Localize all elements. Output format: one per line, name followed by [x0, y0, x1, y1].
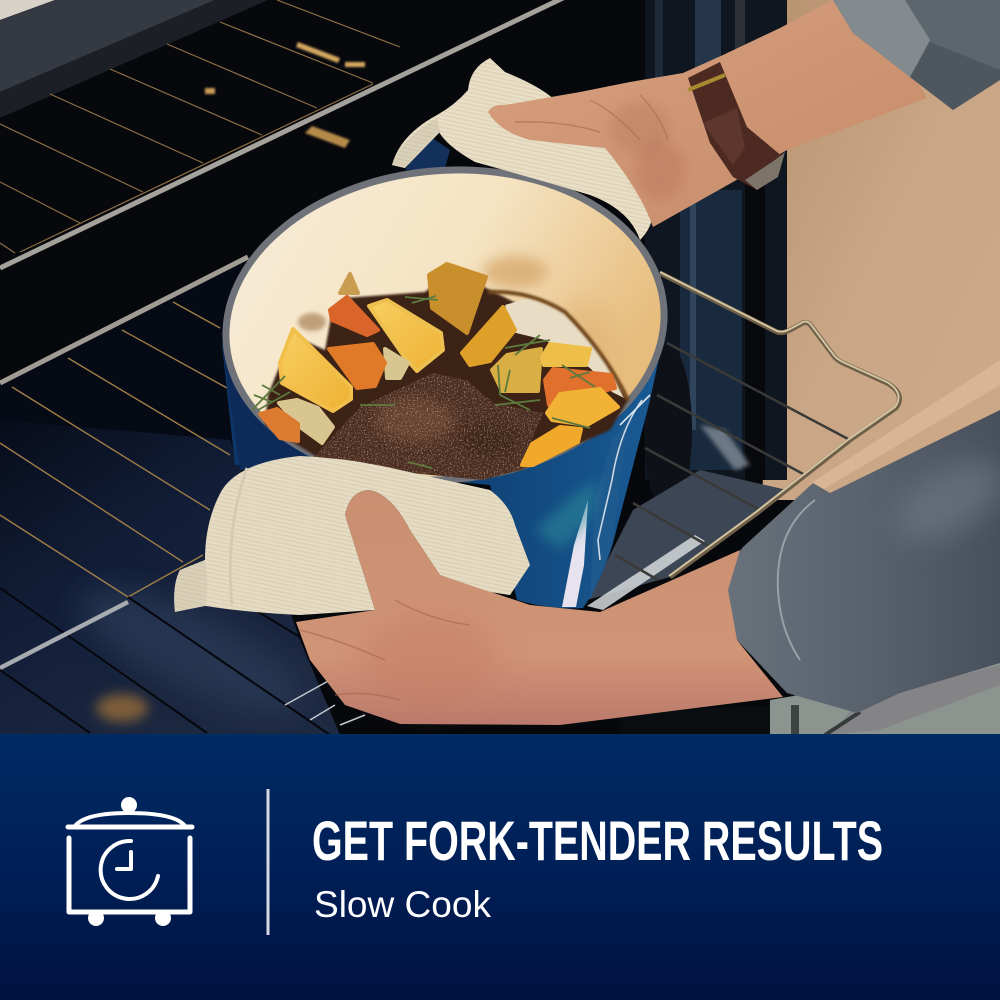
blue pot body: [222, 320, 667, 608]
upper oven rack: [0, 0, 565, 268]
parchment fold: [505, 298, 624, 398]
clock arc: [101, 841, 158, 899]
upper hand and wrist: [488, 0, 927, 227]
clock hands: [117, 852, 131, 869]
cooker body: [69, 838, 190, 912]
beef seared speckle: [310, 370, 546, 482]
potato back: [429, 264, 486, 333]
oven top edge and door seal: [0, 0, 268, 118]
stains on left wall: [298, 313, 326, 331]
lid knob: [121, 797, 137, 813]
lower arm and hand: [296, 490, 783, 725]
pot rim and cream interior: [209, 148, 681, 502]
pot handle behind mitt: [405, 135, 450, 170]
oven floor at right: [587, 470, 787, 610]
onion centre: [385, 349, 408, 378]
vertical divider: [266, 789, 270, 935]
potato right: [547, 389, 618, 425]
bottom right glass reflection: [620, 660, 1000, 735]
potato mid right: [462, 307, 515, 365]
lid rim: [68, 824, 192, 830]
carrot centre: [329, 344, 385, 388]
browned juices: [265, 270, 628, 470]
warm reflections in back wall: [205, 42, 365, 148]
wheel left: [88, 910, 104, 926]
subtitle: Slow Cook: [314, 884, 491, 925]
beef: [313, 373, 543, 480]
carrot top: [330, 297, 378, 335]
grey shirt sleeve: [728, 410, 1000, 713]
onion left: [279, 400, 333, 443]
lid dome: [75, 813, 185, 826]
right rack wires and handle: [615, 272, 899, 580]
rosemary: [252, 296, 595, 468]
wristwatch strap: [688, 62, 785, 190]
wood cabinet panel: [762, 0, 1000, 500]
bottom oven mitt: [174, 456, 530, 615]
icon: slow cooker with clock: [68, 797, 192, 926]
potato square: [542, 344, 590, 365]
wheel right: [155, 910, 171, 926]
upper shirt cuff: [833, 0, 1000, 110]
pot roast with vegetables: [252, 264, 628, 482]
top oven mitt: [392, 58, 653, 240]
potato lower: [522, 427, 581, 465]
potato top: [369, 300, 443, 371]
bottom blue banner: [0, 734, 1000, 1000]
potato large left: [280, 329, 351, 411]
carrot left: [260, 409, 298, 441]
onion skin: [340, 274, 358, 293]
carrot right: [545, 369, 615, 405]
potato centre: [492, 349, 541, 391]
oven cavity background: [0, 0, 1000, 735]
lower oven rack: [0, 257, 365, 735]
oven door frame: [644, 0, 787, 515]
